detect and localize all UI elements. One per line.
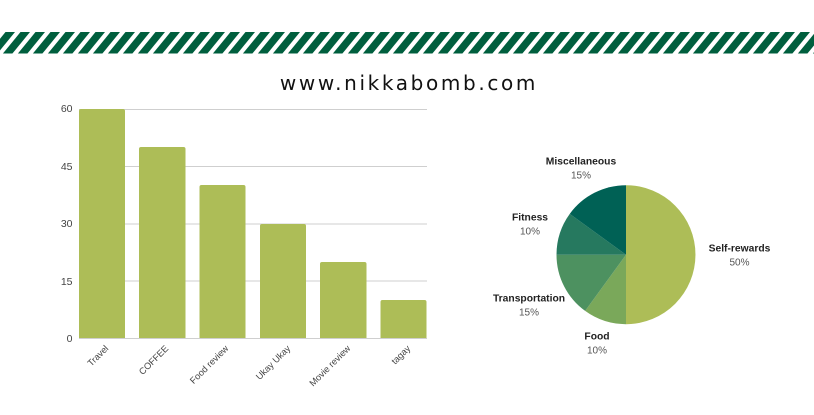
slice: Food [585,255,626,324]
label: Transportation: Transportation [493,294,565,304]
x axis labels: COFFEE [137,343,170,377]
x axis labels: Food review [188,343,231,386]
title: www.nikkabomb.com [280,71,538,95]
label: Fitness: 10% [520,226,540,238]
label: Miscellaneous: 15% [571,170,591,182]
x axis labels [86,343,413,388]
label: Food: 10% [587,346,607,356]
label: Self-rewards: Self-rewards [709,244,771,254]
bar chart [61,103,427,388]
striped banner [0,32,814,54]
y axis labels [61,103,73,345]
x axis labels: tagay [389,343,413,366]
slice: Self-rewards [626,185,695,324]
label: Transportation: 15% [519,308,539,318]
y axis gridlines [79,110,427,338]
bars [79,109,426,338]
y axis labels: 30 [61,218,73,230]
label: Self-rewards: 50% [729,258,750,268]
x axis labels: Ukay Ukay [254,343,293,382]
y axis labels: 45 [61,161,73,173]
x axis labels: Travel [86,343,110,368]
slice: Fitness [556,214,626,255]
label: Miscellaneous: Miscellaneous [546,156,616,168]
y axis labels: 0 [67,333,73,345]
pie chart [556,185,695,324]
label: Fitness: Fitness [512,212,548,224]
y axis labels: 60 [61,103,73,115]
slice: Miscellaneous [570,185,626,255]
slice: Transportation [556,255,626,311]
y axis labels: 15 [61,276,73,288]
pie labels [493,156,771,356]
label: Food: Food [584,332,610,342]
x axis labels: Movie review [307,343,353,388]
